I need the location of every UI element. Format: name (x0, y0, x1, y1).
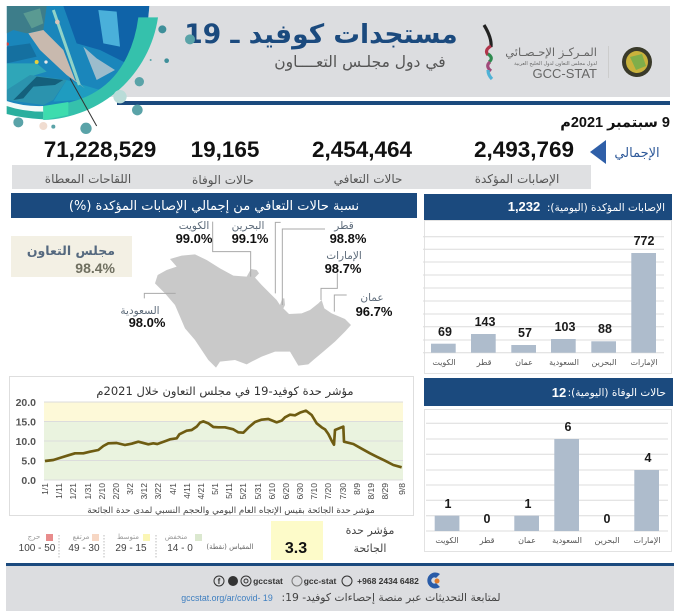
scale legend: المقياس (نقطة) (206, 543, 254, 551)
index label (346, 524, 394, 555)
chart title: مؤشر حدة كوفيد-19 في مجلس التعاون خلال 2021م (96, 384, 354, 399)
y axis labels: 5.0 (21, 456, 36, 468)
x axis dates: 7/10 (309, 483, 319, 500)
total: recoveries (312, 137, 413, 186)
title: مستجدات كوفيد ـ 19 (184, 19, 458, 50)
severity index row (19, 521, 394, 560)
scale legend: متوسط (117, 533, 139, 541)
header image: vaccine circle (6, 6, 195, 134)
droplets (13, 25, 195, 134)
y axis labels (16, 397, 36, 487)
x axis dates: 6/30 (295, 483, 305, 500)
x axis dates: 2/20 (111, 483, 121, 500)
label: UAE: 98.7% (325, 261, 362, 276)
date: 9 سبتمبر 2021م (560, 115, 670, 131)
heading (424, 194, 672, 220)
bar: Saudi Arabia: السعودية (552, 536, 582, 545)
panel: daily deaths (424, 378, 673, 552)
total: recoveries: 2,454,464 (312, 137, 413, 162)
total: deaths: حالات الوفاة (192, 173, 254, 188)
total: confirmed (474, 137, 574, 187)
index value: 3.3 (285, 540, 307, 557)
bar: UAE: الإمارات (633, 536, 661, 546)
footer link line: لمتابعة التحديثات عبر منصة إحصاءات كوفيد- 19: (281, 591, 501, 604)
bar: Kuwait: الكويت (432, 358, 456, 367)
x axis dates: 5/1 (210, 483, 220, 495)
footer link line (181, 591, 501, 604)
y axis labels: 10.0 (16, 436, 36, 448)
scale legend: 29 - 15 (115, 543, 147, 554)
x axis dates: 7/20 (323, 483, 333, 500)
GCC-STAT logo (484, 25, 652, 81)
bar: Oman: عمان (518, 536, 536, 545)
y axis labels: 0.0 (21, 475, 36, 487)
label: Kuwait: الكويت (179, 220, 209, 232)
x axis dates: 5/11 (224, 483, 234, 499)
label: Saudi Arabia: 98.0% (129, 315, 166, 330)
ribbon mark (484, 25, 492, 79)
GCC-STAT logo: لدول مجلس التعاون لدول الخليج العربية (514, 61, 597, 67)
label: Oman: عمان (360, 292, 384, 304)
bar: Oman: 1 (525, 497, 532, 511)
total: vaccines (44, 137, 156, 186)
x axis dates: 6/10 (267, 483, 277, 500)
scale legend: حرج (28, 533, 40, 541)
x axis dates: 5/21 (238, 483, 248, 500)
social icons and handles: gcc-stat (304, 576, 336, 586)
x axis dates: 9/8 (397, 483, 407, 495)
footer link line: gccstat.org/ar/covid- 19 (181, 593, 273, 603)
total: vaccines: 71,228,529 (44, 137, 156, 162)
y axis labels: 20.0 (16, 397, 36, 409)
subtitle: في دول مجلـس التعــــاون (274, 53, 446, 72)
bar: Bahrain: 88 (598, 322, 612, 336)
heading: حالات الوفاة (اليومية): (568, 387, 666, 399)
x axis dates: 3/22 (153, 483, 163, 500)
label: UAE (325, 250, 362, 276)
bar: Oman (511, 326, 536, 367)
totals label bar (12, 165, 591, 189)
header banner (100, 6, 670, 105)
scale legend: 49 - 30 (68, 543, 100, 554)
footer (6, 563, 674, 611)
social icons and handles (214, 572, 440, 589)
x axis dates: 1/1 (40, 483, 50, 495)
bar: Oman: عمان (515, 358, 533, 367)
bar: UAE (630, 234, 658, 368)
x axis dates: 1/31 (83, 483, 93, 500)
label: Bahrain: 99.1% (232, 231, 269, 246)
x axis dates: 8/9 (352, 483, 362, 495)
needle (70, 78, 97, 126)
severity line (45, 411, 402, 467)
bar: Oman (514, 497, 539, 545)
chart caption: مؤشر حدة الجائحة بقيس الإتجاه العام اليومي والحجم النسبي لمدى حدة الجائحة (87, 506, 375, 516)
x axis dates: 7/30 (338, 483, 348, 500)
total: deaths (191, 137, 259, 188)
x axis dates: 4/11 (182, 483, 192, 499)
heading: الإصابات المؤكدة (اليومية): (547, 202, 665, 214)
bar: Oman: 57 (518, 326, 532, 340)
x axis dates: 3/2 (125, 483, 135, 495)
bar: UAE (633, 451, 661, 546)
social icons and handles: f (218, 577, 221, 586)
label: Kuwait (176, 220, 213, 246)
label: Kuwait: 99.0% (176, 231, 213, 246)
bar: Qatar: 0 (484, 512, 491, 526)
bar: Qatar: قطر (476, 358, 492, 367)
bar: Saudi Arabia: السعودية (549, 358, 579, 367)
label: Qatar: 98.8% (330, 231, 367, 246)
teal ring (43, 17, 158, 120)
bar: Saudi Arabia: 103 (555, 320, 575, 334)
label: UAE: الإمارات (326, 250, 362, 262)
bar: Bahrain (591, 322, 616, 367)
label: Saudi Arabia (120, 305, 166, 330)
label: Bahrain: البحرين (232, 220, 264, 232)
scale legend: 14 - 0 (167, 543, 193, 554)
heading: 1,232 (508, 199, 540, 214)
GCC emblem (622, 47, 652, 77)
x axis dates: 4/21 (196, 483, 206, 500)
label: Qatar: قطر (333, 220, 354, 232)
GCC average box (11, 236, 132, 277)
bar: Kuwait: الكويت (435, 536, 459, 545)
x axis dates: 8/29 (380, 483, 390, 500)
arrow: total marker (590, 140, 606, 164)
x axis dates: 1/11 (54, 483, 64, 499)
panel heading: نسبة حالات التعافي من إجمالي الإصابات المؤكدة (%) (69, 199, 359, 214)
total: recoveries: حالات التعافي (334, 172, 402, 186)
social icons and handles: gccstat (253, 576, 283, 586)
label: Oman (356, 292, 393, 319)
total label: الإجمالي (614, 146, 660, 161)
x axis dates: 4/1 (168, 483, 178, 495)
GCC average box: 98.4% (75, 260, 116, 276)
x axis dates (40, 483, 407, 500)
scale legend: منخفض (165, 533, 187, 541)
total: confirmed: 2,493,769 (474, 137, 574, 162)
total: deaths: 19,165 (191, 137, 259, 162)
panel: severity line chart (10, 376, 414, 516)
bar: Kuwait: 69 (438, 325, 452, 339)
bar: Bahrain: 0 (604, 512, 611, 526)
totals row (12, 137, 660, 189)
bar: Qatar (479, 512, 495, 545)
scale legend (19, 533, 254, 558)
x axis dates: 2/10 (97, 483, 107, 500)
bar: Qatar: قطر (479, 536, 495, 545)
heading: 12 (552, 385, 566, 400)
panel: daily confirmed cases (423, 194, 672, 374)
bar: Bahrain: البحرين (595, 536, 619, 545)
index value (271, 521, 323, 560)
panel: recovery rate map (11, 193, 417, 368)
white and teal strip (7, 101, 43, 112)
map of GCC (155, 254, 351, 368)
x axis dates: 6/20 (281, 483, 291, 500)
label: Qatar (330, 220, 367, 246)
GCC-STAT logo: GCC-STAT (532, 66, 597, 81)
bar: Bahrain: البحرين (592, 358, 616, 367)
bar: Saudi Arabia (549, 320, 579, 367)
bar: Qatar: 143 (475, 315, 495, 329)
social icons and handles: +968 2434 6482 (357, 576, 419, 586)
bar: Saudi Arabia: 6 (565, 420, 572, 434)
label: Bahrain (232, 220, 269, 246)
index label: مؤشر حدة (346, 524, 394, 537)
index label: الجائحة (354, 542, 386, 555)
GCC average box: مجلس التعاون (27, 243, 115, 258)
bar: UAE: 772 (634, 234, 654, 248)
x axis dates: 5/31 (253, 483, 263, 500)
bar: Kuwait (435, 497, 459, 545)
bar: Kuwait (431, 325, 456, 367)
bar: UAE: 4 (645, 451, 652, 465)
scale legend: مرتفع (73, 533, 90, 541)
x axis dates: 8/19 (366, 483, 376, 500)
heading (424, 378, 673, 406)
bar: Bahrain (595, 512, 619, 545)
y axis labels: 15.0 (16, 416, 36, 428)
bar: Qatar (471, 315, 496, 367)
map leader lines (144, 222, 347, 312)
label: Oman: 96.7% (356, 304, 393, 319)
x axis dates: 3/12 (139, 483, 149, 500)
bar: UAE: الإمارات (630, 358, 658, 368)
severity bands (44, 402, 403, 480)
centre name: المـركـز الإحـصـائي (505, 45, 597, 60)
bar: Saudi Arabia (552, 420, 582, 545)
bar: Kuwait: 1 (445, 497, 452, 511)
total: confirmed: الإصابات المؤكدة (475, 172, 559, 187)
x axis dates: 1/21 (68, 483, 78, 500)
total: vaccines: اللقاحات المعطاة (45, 172, 131, 186)
panel heading (11, 193, 417, 218)
label: Saudi Arabia: السعودية (120, 305, 160, 317)
scale legend: 100 - 50 (19, 543, 56, 554)
